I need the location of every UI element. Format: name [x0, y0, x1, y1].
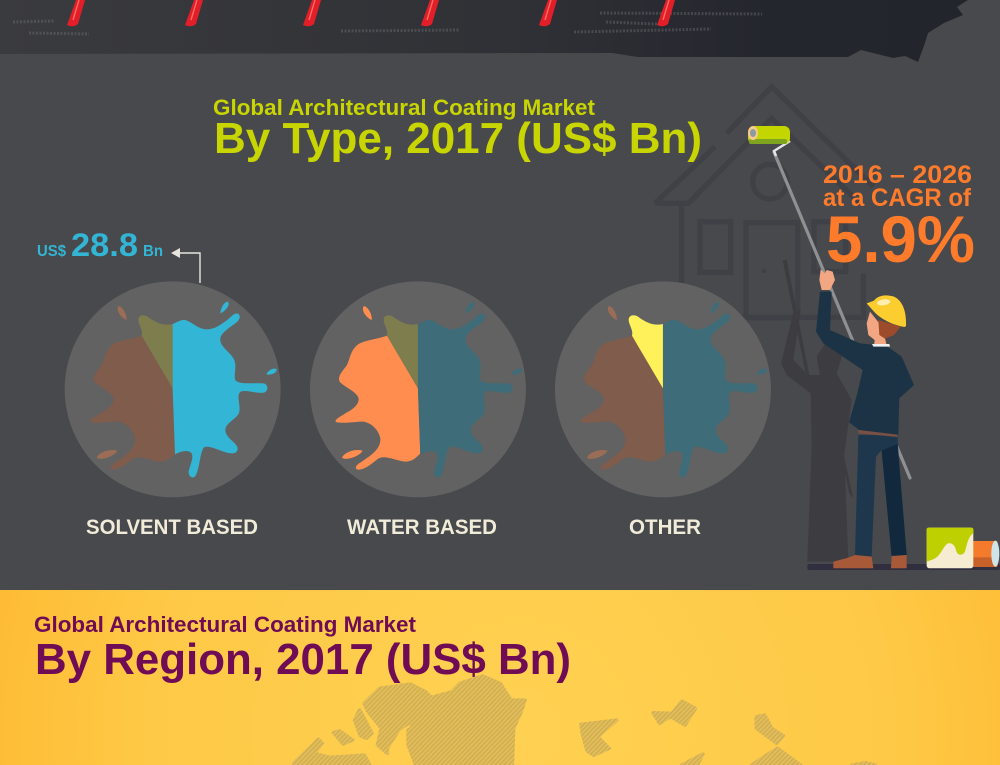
- callout: CAGR: [823, 161, 975, 276]
- hand: [819, 269, 835, 290]
- paint can lying: [972, 541, 999, 567]
- heading: by type: Global Architectural Coating Market: [213, 95, 596, 120]
- world map sketch: [293, 676, 875, 765]
- hair: [878, 320, 901, 339]
- label: water based: WATER BASED: [347, 516, 497, 539]
- panel: water based splash: [310, 281, 526, 497]
- label: solvent based: SOLVENT BASED: [86, 516, 258, 539]
- panel: solvent based splash: [65, 281, 281, 497]
- left shoe: [833, 555, 873, 568]
- paint brush handles: [67, 0, 675, 26]
- panel: yellow region band: [0, 590, 1000, 765]
- hat highlight: [877, 298, 891, 306]
- callout: CAGR: at a CAGR of: [823, 184, 972, 212]
- background: dark panel: [0, 0, 1000, 592]
- collar: [872, 344, 890, 347]
- callout: CAGR: 5.9%: [826, 202, 975, 276]
- callout: US$ 28.8 Bn: 28.8: [71, 227, 138, 263]
- icon: house silhouette: [655, 87, 873, 318]
- trousers: [855, 435, 907, 557]
- face: [867, 312, 885, 342]
- callout: CAGR: 2016 – 2026: [823, 161, 972, 189]
- icon: worker shadow: [781, 260, 853, 562]
- hard hat: [867, 295, 906, 327]
- label: other: OTHER: [629, 516, 701, 539]
- callout: US$ 28.8 Bn: Bn: [143, 243, 163, 260]
- heading: by type: By Type, 2017 (US$ Bn): [214, 114, 702, 163]
- callout: US$ 28.8 Bn: [37, 227, 200, 283]
- right leg: [882, 444, 907, 557]
- right shoe: [891, 555, 907, 568]
- brush stroke band: [0, 0, 968, 62]
- ground shadow: [807, 564, 1000, 570]
- neck: [874, 338, 887, 345]
- callout: US$ 28.8 Bn: US$: [37, 243, 66, 260]
- icon: painter worker: [807, 269, 1000, 570]
- heading: by region: [34, 612, 571, 684]
- heading: by region: By Region, 2017 (US$ Bn): [35, 635, 571, 684]
- panel: other splash: [555, 281, 771, 497]
- belt: [858, 430, 897, 437]
- icon: paint roller: [748, 126, 910, 478]
- heading: by region: Global Architectural Coating Market: [34, 612, 417, 637]
- jacket: [816, 292, 914, 435]
- paint bucket: [927, 528, 973, 568]
